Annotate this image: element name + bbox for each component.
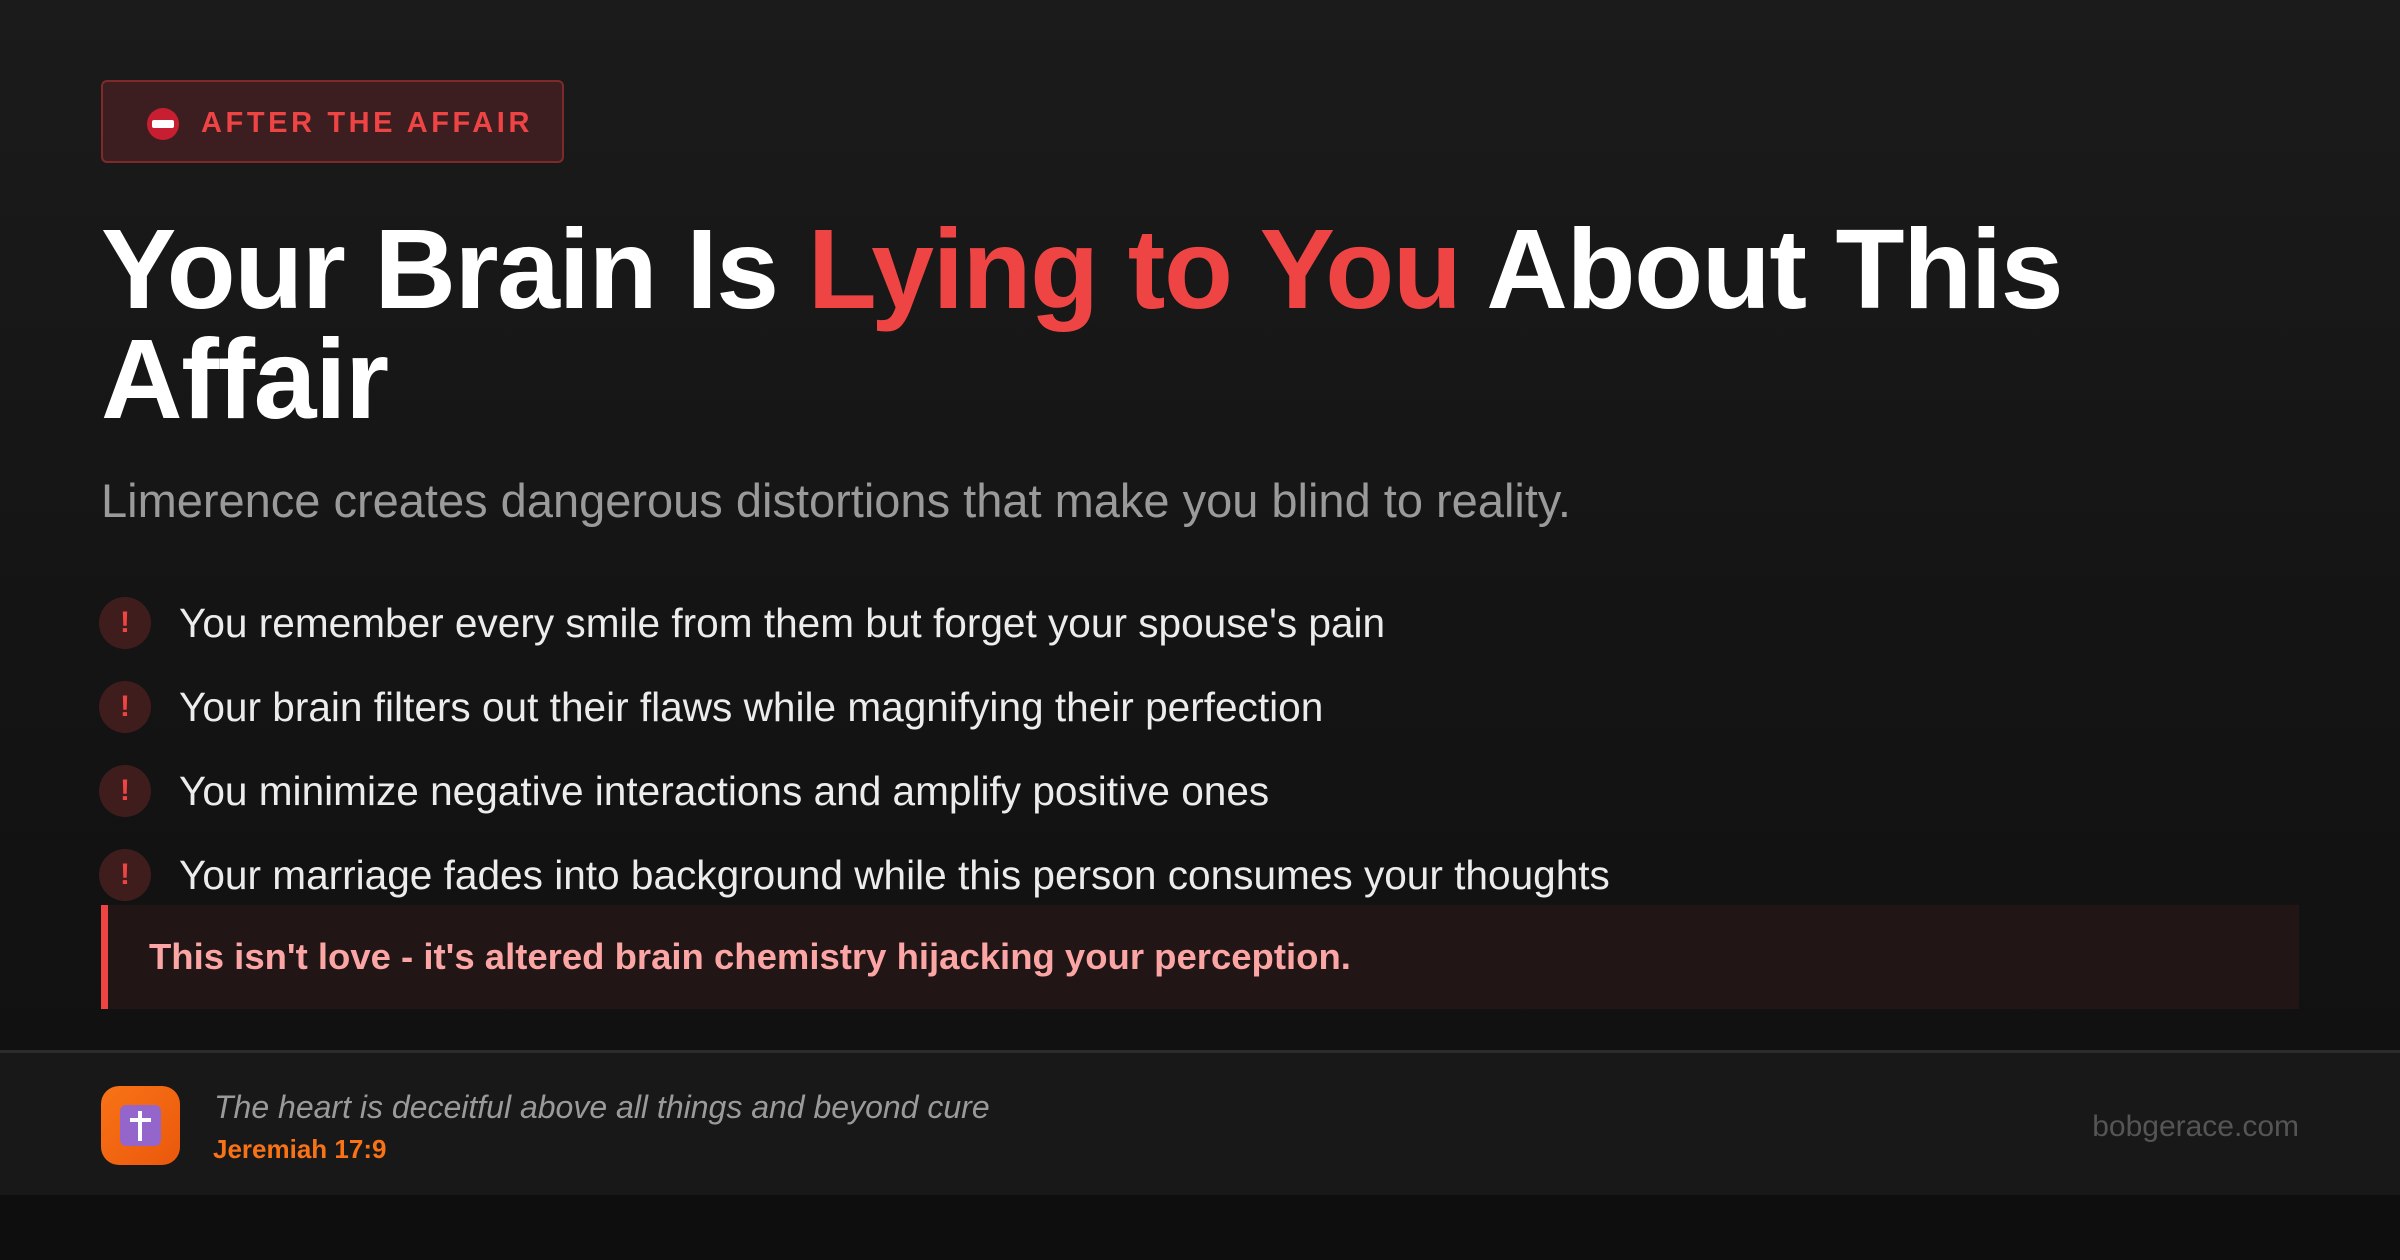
bullet list [99, 597, 1610, 901]
bullet 2: ! [120, 690, 130, 723]
bullet 2: Your brain filters out their flaws while magnifying their perfection [179, 684, 1323, 730]
icon: cross [101, 1086, 180, 1165]
bullet 1: ! [120, 606, 130, 639]
callout: This isn't love - it's altered brain chemistry hijacking your perception. [149, 936, 1351, 977]
badge: after the affair: AFTER THE AFFAIR [201, 107, 533, 139]
bullet 1: You remember every smile from them but forget your spouse's pain [179, 600, 1385, 646]
bullet 4: ! [120, 858, 130, 891]
title: Your Brain Is Lying to You About This Affair [101, 206, 2062, 442]
callout [101, 905, 2299, 1009]
bullet 3: ! [120, 774, 130, 807]
footer [0, 1050, 2400, 1195]
quote text: The heart is deceitful above all things and beyond cure [214, 1089, 990, 1125]
bullet 4: Your marriage fades into background while this person consumes your thoughts [179, 852, 1610, 898]
scripture reference: Jeremiah 17:9 [213, 1134, 386, 1164]
subtitle: Limerence creates dangerous distortions that make you blind to reality. [101, 474, 1571, 527]
website: bobgerace.com [2092, 1110, 2299, 1143]
badge: after the affair [101, 80, 564, 163]
bullet 3: You minimize negative interactions and amplify positive ones [179, 768, 1269, 814]
